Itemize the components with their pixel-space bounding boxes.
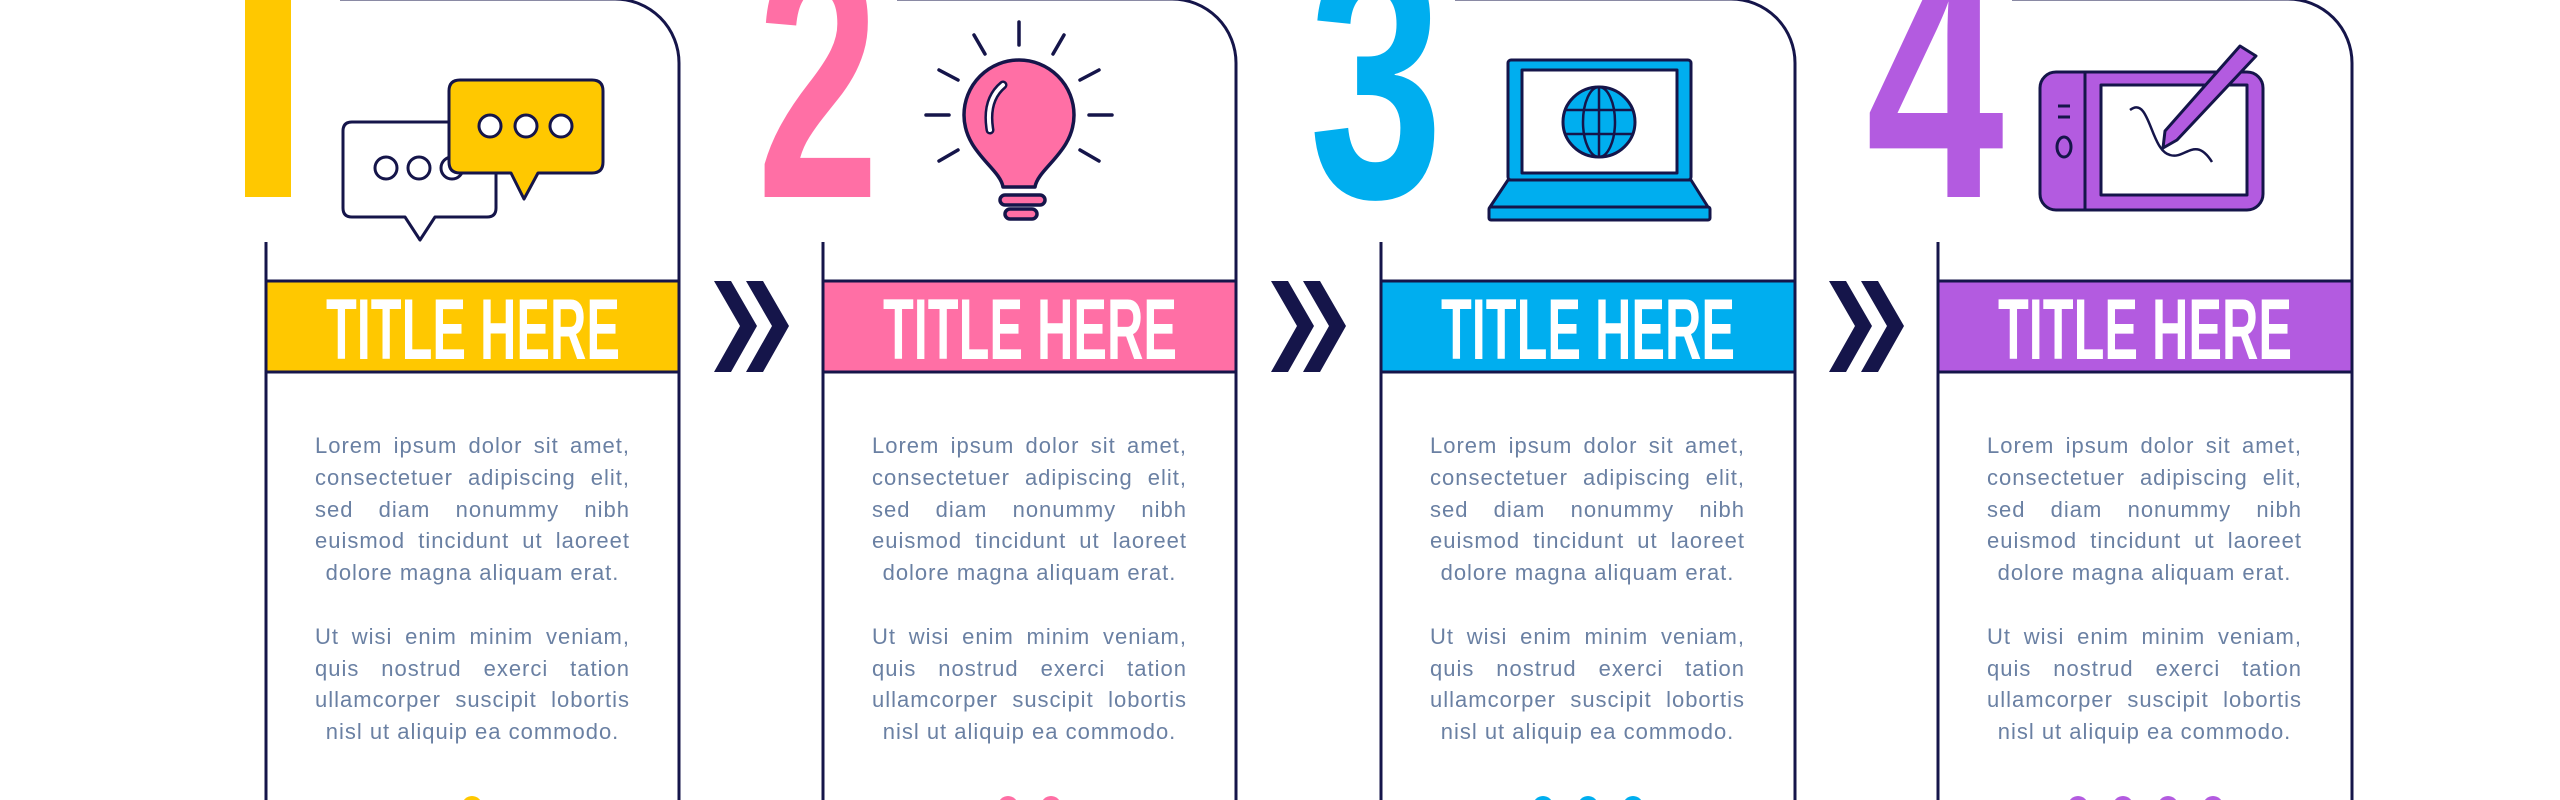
text block panel 3: sed diam nonummy nibh (1430, 497, 1745, 522)
icon: light bulb (926, 22, 1112, 219)
text block panel 2: consectetuer adipiscing elit, (872, 465, 1187, 490)
arrow: chevrons 1 (714, 281, 789, 372)
text block panel 3: Lorem ipsum dolor sit amet, (1430, 433, 1745, 458)
text block panel 1: Lorem ipsum dolor sit amet, (315, 433, 630, 458)
text block panel 2: euismod tincidunt ut laoreet (872, 528, 1187, 553)
panel 2 frame (823, 0, 1236, 800)
text block panel 1: ullamcorper suscipit lobortis (315, 687, 630, 712)
icon: chat bubbles (343, 80, 603, 240)
text block panel 2: ullamcorper suscipit lobortis (872, 687, 1187, 712)
dots panel 4 (2068, 796, 2223, 800)
title band 2 (823, 281, 1236, 378)
text block panel 4: Ut wisi enim minim veniam, (1987, 624, 2302, 649)
text block panel 2: Lorem ipsum dolor sit amet, (872, 433, 1187, 458)
title band 3: TITLE HERE (1441, 282, 1735, 378)
text block panel 1: euismod tincidunt ut laoreet (315, 528, 630, 553)
text block panel 3: dolore magna aliquam erat. (1441, 560, 1734, 585)
text block panel 3: quis nostrud exerci tation (1430, 656, 1745, 681)
dots panel 1 (462, 796, 482, 800)
icon: drawing tablet (2040, 46, 2263, 210)
text block panel 2: dolore magna aliquam erat. (883, 560, 1176, 585)
text block panel 1 (315, 433, 630, 744)
text block panel 1: nisl ut aliquip ea commodo. (326, 719, 619, 744)
text block panel 1: sed diam nonummy nibh (315, 497, 630, 522)
icon: laptop with globe (1489, 60, 1710, 220)
text block panel 4: Lorem ipsum dolor sit amet, (1987, 433, 2302, 458)
text block panel 1: dolore magna aliquam erat. (326, 560, 619, 585)
text block panel 4: nisl ut aliquip ea commodo. (1998, 719, 2291, 744)
text block panel 1: consectetuer adipiscing elit, (315, 465, 630, 490)
text block panel 4 (1987, 433, 2302, 744)
text block panel 2: sed diam nonummy nibh (872, 497, 1187, 522)
arrow: chevrons 2 (1271, 281, 1346, 372)
text block panel 3: consectetuer adipiscing elit, (1430, 465, 1745, 490)
text block panel 4: quis nostrud exerci tation (1987, 656, 2302, 681)
text block panel 4: consectetuer adipiscing elit, (1987, 465, 2302, 490)
title band 1 (266, 281, 679, 378)
title band 1: TITLE HERE (326, 282, 620, 378)
text block panel 4: dolore magna aliquam erat. (1998, 560, 2291, 585)
text block panel 3: euismod tincidunt ut laoreet (1430, 528, 1745, 553)
text block panel 2: nisl ut aliquip ea commodo. (883, 719, 1176, 744)
arrow: chevrons 3 (1829, 281, 1904, 372)
text block panel 2: Ut wisi enim minim veniam, (872, 624, 1187, 649)
text block panel 3: ullamcorper suscipit lobortis (1430, 687, 1745, 712)
panel 4 frame (1938, 0, 2352, 800)
text block panel 1: quis nostrud exerci tation (315, 656, 630, 681)
title band 2: TITLE HERE (883, 282, 1177, 378)
text block panel 2 (872, 433, 1187, 744)
title band 4 (1938, 281, 2352, 378)
dots panel 2 (998, 796, 1061, 800)
text block panel 4: sed diam nonummy nibh (1987, 497, 2302, 522)
title band 4: TITLE HERE (1998, 282, 2292, 378)
panel 3 frame (1381, 0, 1795, 800)
title band 3 (1381, 281, 1795, 378)
text block panel 3 (1430, 433, 1745, 744)
text block panel 1: Ut wisi enim minim veniam, (315, 624, 630, 649)
text block panel 2: quis nostrud exerci tation (872, 656, 1187, 681)
panel 1 frame (266, 0, 679, 800)
dots panel 3 (1533, 796, 1643, 800)
text block panel 4: ullamcorper suscipit lobortis (1987, 687, 2302, 712)
number 1 (245, 0, 291, 197)
text block panel 4: euismod tincidunt ut laoreet (1987, 528, 2302, 553)
text block panel 3: Ut wisi enim minim veniam, (1430, 624, 1745, 649)
text block panel 3: nisl ut aliquip ea commodo. (1441, 719, 1734, 744)
